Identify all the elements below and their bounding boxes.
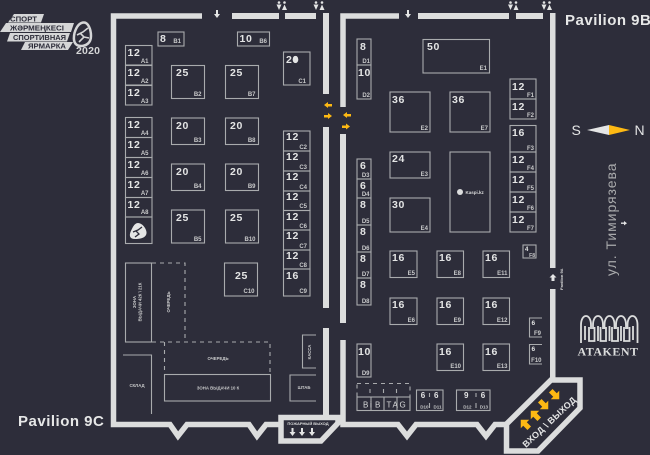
stalls column D: 6: [360, 180, 366, 192]
stalls column E: E9: [454, 318, 462, 324]
service zones, left pavilion: ЗОНА: [132, 296, 137, 308]
stalls D10 to D13: 6: [421, 391, 426, 400]
stalls column E: 16: [439, 252, 452, 264]
stalls column F: 12: [512, 174, 525, 186]
stalls column D: 6: [360, 160, 366, 172]
stalls column B: B7: [248, 92, 256, 98]
stalls column C: [224, 52, 310, 296]
sponsor mini stalls: i: [370, 400, 372, 410]
stalls column B: 25: [176, 67, 189, 79]
compass: [572, 122, 645, 138]
stalls column E: E13: [497, 364, 508, 370]
stalls column C: C2: [299, 145, 308, 151]
stalls column B: [158, 32, 270, 243]
street label: ул. Тимирязева: [603, 163, 619, 276]
stalls column E: 36: [452, 94, 465, 106]
stalls column F: 4: [525, 247, 529, 253]
stalls column F: F5: [527, 186, 535, 192]
stalls D10 to D13: 6: [481, 391, 486, 400]
stalls column B: 20: [230, 120, 243, 132]
stalls column A: A2: [141, 79, 149, 85]
walls: right pavilion: [340, 13, 556, 436]
stalls column D: D2: [362, 93, 371, 99]
stalls column E: E6: [408, 318, 416, 324]
stalls column D: D4: [362, 192, 370, 198]
stalls column A: 12: [128, 139, 140, 151]
walls: left pavilion: [114, 13, 329, 436]
stalls column D: 8: [360, 279, 366, 291]
stalls column E: 30: [392, 199, 405, 211]
sponsor mini stalls: T: [386, 400, 392, 410]
event logo: ЯРМАРКА: [28, 44, 66, 50]
stalls D10 to D13: 9: [464, 391, 469, 400]
heading: Pavilion 9B: Pavilion 9B: [565, 12, 650, 29]
pavilion 9A marker: Pavilion 9A: [559, 268, 564, 290]
stalls column C: 12: [286, 211, 299, 223]
stalls column F: 12: [512, 154, 525, 166]
stalls column E: 50: [427, 41, 440, 53]
sponsor mini stalls: B: [375, 400, 380, 410]
service zones, left pavilion: ЗОНА ВЫДАЧИ 10 К: [197, 386, 240, 390]
stalls column F: F7: [527, 226, 535, 232]
service zones, left pavilion: [123, 263, 316, 414]
stalls column B: 20: [176, 120, 189, 132]
stalls column B: B2: [194, 92, 202, 98]
Kaspi stall: Kaspi.kz: [466, 190, 485, 195]
entrance and exit: [506, 380, 580, 451]
stalls column F: 12: [512, 194, 525, 206]
stalls column C: 25: [235, 270, 248, 282]
stalls column E: E11: [497, 271, 508, 277]
stalls column E: E12: [497, 318, 508, 324]
compass: N: [634, 122, 645, 138]
stalls column C: 12: [286, 230, 299, 242]
stalls D10 to D13: D10: [420, 404, 429, 410]
top door arrows: [214, 10, 411, 18]
stalls column B: 8: [160, 33, 166, 45]
stalls column C: 16: [286, 270, 299, 282]
stalls column E: E4: [421, 226, 429, 232]
stalls D10 to D13: D12: [463, 404, 472, 410]
sponsor mini stalls: B: [363, 400, 368, 410]
service zones, left pavilion: ОЧЕРЕДЬ: [207, 356, 229, 361]
street direction arrow: [621, 221, 627, 225]
stalls column D: [357, 39, 371, 377]
stalls column C: C1: [298, 79, 307, 85]
stalls column A: A7: [141, 191, 149, 197]
stalls column E: 16: [485, 299, 498, 311]
stalls column C: C7: [299, 244, 308, 250]
stalls column F: F9: [534, 331, 542, 337]
event logo: СПОРТ: [10, 16, 38, 23]
stalls column D: D5: [362, 219, 370, 225]
service zones, left pavilion: ШТАБ: [298, 385, 310, 390]
compass: S: [572, 122, 581, 138]
stalls column B: B1: [173, 39, 182, 45]
stalls column E: E2: [421, 126, 429, 132]
stalls column B: B4: [194, 184, 202, 190]
stalls column D: 8: [360, 253, 366, 265]
stalls column D: 8: [360, 226, 366, 238]
stalls D10 to D13: 6: [434, 391, 439, 400]
stalls column A: A8: [141, 210, 149, 216]
stalls column A: 12: [128, 47, 140, 59]
stalls column D: 10: [358, 346, 371, 358]
stalls column B: 20: [230, 166, 243, 178]
stalls column A: A4: [141, 131, 149, 137]
stalls column F: 12: [512, 214, 525, 226]
event logo: [0, 14, 100, 57]
stalls column A: 12: [128, 67, 140, 79]
stalls column E: 16: [485, 252, 498, 264]
stalls column B: B6: [259, 39, 268, 45]
service zones, left pavilion: КАССА: [307, 345, 312, 359]
stalls column A: 12: [128, 179, 140, 191]
stalls column F: F3: [527, 146, 535, 152]
stalls column E: 36: [392, 94, 405, 106]
stalls column A: A1: [141, 59, 149, 65]
stalls column C: 12: [286, 250, 299, 262]
stalls column D: D8: [362, 299, 370, 305]
sponsor mini stalls: [357, 384, 410, 410]
stalls column C: C5: [299, 204, 308, 210]
stalls column F: F6: [527, 206, 535, 212]
stalls column E: 16: [392, 252, 405, 264]
pavilion 9A marker: [550, 268, 564, 290]
stalls column B: 25: [230, 67, 243, 79]
sponsor mini stalls: G: [400, 400, 406, 410]
stalls column D: 8: [360, 199, 366, 211]
stalls column C: C6: [299, 224, 308, 230]
stalls column C: C8: [299, 263, 308, 269]
stalls column C: 20: [286, 54, 299, 66]
stalls column A: 12: [128, 159, 140, 171]
heading: Pavilion 9C: Pavilion 9C: [18, 413, 104, 430]
stalls column D: D7: [362, 272, 370, 278]
stalls D10 to D13: D11: [433, 404, 442, 410]
stalls column D: D9: [362, 371, 370, 377]
stalls column E: E8: [454, 271, 462, 277]
stalls column A: 12: [128, 87, 140, 99]
stalls column A: 12: [128, 199, 140, 211]
stalls column F: 6: [532, 320, 536, 327]
stalls column E: 16: [392, 299, 405, 311]
entrance and exit: ВХОД \ ВЫХОД: [521, 394, 578, 449]
stalls column E: E5: [408, 271, 416, 277]
stalls column E: 16: [485, 346, 498, 358]
stalls column E: E1: [480, 66, 488, 72]
stalls D10 to D13: [416, 390, 490, 410]
Atakent logo: ATAKENT: [577, 344, 639, 358]
stalls column C: C9: [299, 289, 308, 295]
stalls column F: F10: [531, 358, 542, 364]
fire exit: ПОЖАРНЫЙ ВЫХОД: [287, 421, 329, 426]
sponsor mini stalls: A: [392, 400, 398, 410]
stalls column B: 25: [230, 212, 243, 224]
stalls column C: 12: [286, 151, 299, 163]
stalls column A: A6: [141, 171, 149, 177]
stalls column B: B9: [248, 184, 256, 190]
stalls column C: 12: [286, 131, 299, 143]
stalls column A: 12: [128, 119, 140, 131]
stalls column F: F4: [527, 166, 535, 172]
yellow passage arrows: [324, 102, 351, 130]
service zones, left pavilion: ОЧЕРЕДЬ: [166, 291, 171, 313]
event logo: 2020: [76, 45, 100, 57]
stalls column D: 10: [358, 67, 371, 79]
service zones, left pavilion: ВЫДАЧИ 42К \ 21К: [138, 282, 142, 321]
stalls column E: E3: [421, 172, 429, 178]
stalls column B: B10: [244, 237, 256, 243]
stalls column C: C4: [299, 185, 308, 191]
stalls column E: 16: [439, 346, 452, 358]
stalls column C: 12: [286, 191, 299, 203]
stalls column A: [126, 46, 152, 244]
stalls column F: 12: [512, 101, 525, 113]
fire exit: [281, 418, 338, 441]
stalls D10 to D13: D13: [480, 404, 488, 410]
stalls column F: [510, 79, 542, 364]
stalls column E: 24: [392, 153, 405, 165]
service zones, left pavilion: СКЛАД: [129, 383, 145, 388]
stalls column C: C10: [243, 289, 255, 295]
stalls column D: D1: [362, 59, 371, 65]
Atakent logo: [577, 316, 639, 358]
stalls column E: 16: [439, 299, 452, 311]
event logo: СПОРТИВНАЯ: [13, 35, 66, 42]
stalls column B: B8: [248, 138, 256, 144]
restroom icons: [276, 1, 552, 10]
stalls column B: B3: [194, 138, 202, 144]
stalls column F: 6: [532, 346, 536, 353]
stalls column B: 20: [176, 166, 189, 178]
event logo: ЖӘРМЕҢКЕСІ: [9, 26, 64, 32]
stalls column B: 10: [240, 33, 252, 45]
stalls column A: A5: [141, 151, 149, 157]
stalls column C: C3: [299, 165, 308, 171]
Kaspi stall: [450, 152, 490, 232]
stalls column E: E10: [450, 364, 462, 370]
stalls column D: 8: [360, 41, 366, 53]
stalls column D: D6: [362, 246, 370, 252]
stalls column C: 12: [286, 171, 299, 183]
stalls column E: E7: [481, 126, 489, 132]
stalls column F: F1: [527, 93, 535, 99]
stalls column F: 16: [512, 127, 525, 139]
stalls column D: D3: [362, 173, 370, 179]
stalls column F: 12: [512, 81, 525, 93]
stalls column F: F8: [529, 253, 535, 259]
stalls column B: B5: [194, 237, 202, 243]
stalls column E: [390, 40, 510, 370]
stalls column F: F2: [527, 113, 535, 119]
stalls column A: A3: [141, 99, 149, 105]
stalls column B: 25: [176, 212, 189, 224]
